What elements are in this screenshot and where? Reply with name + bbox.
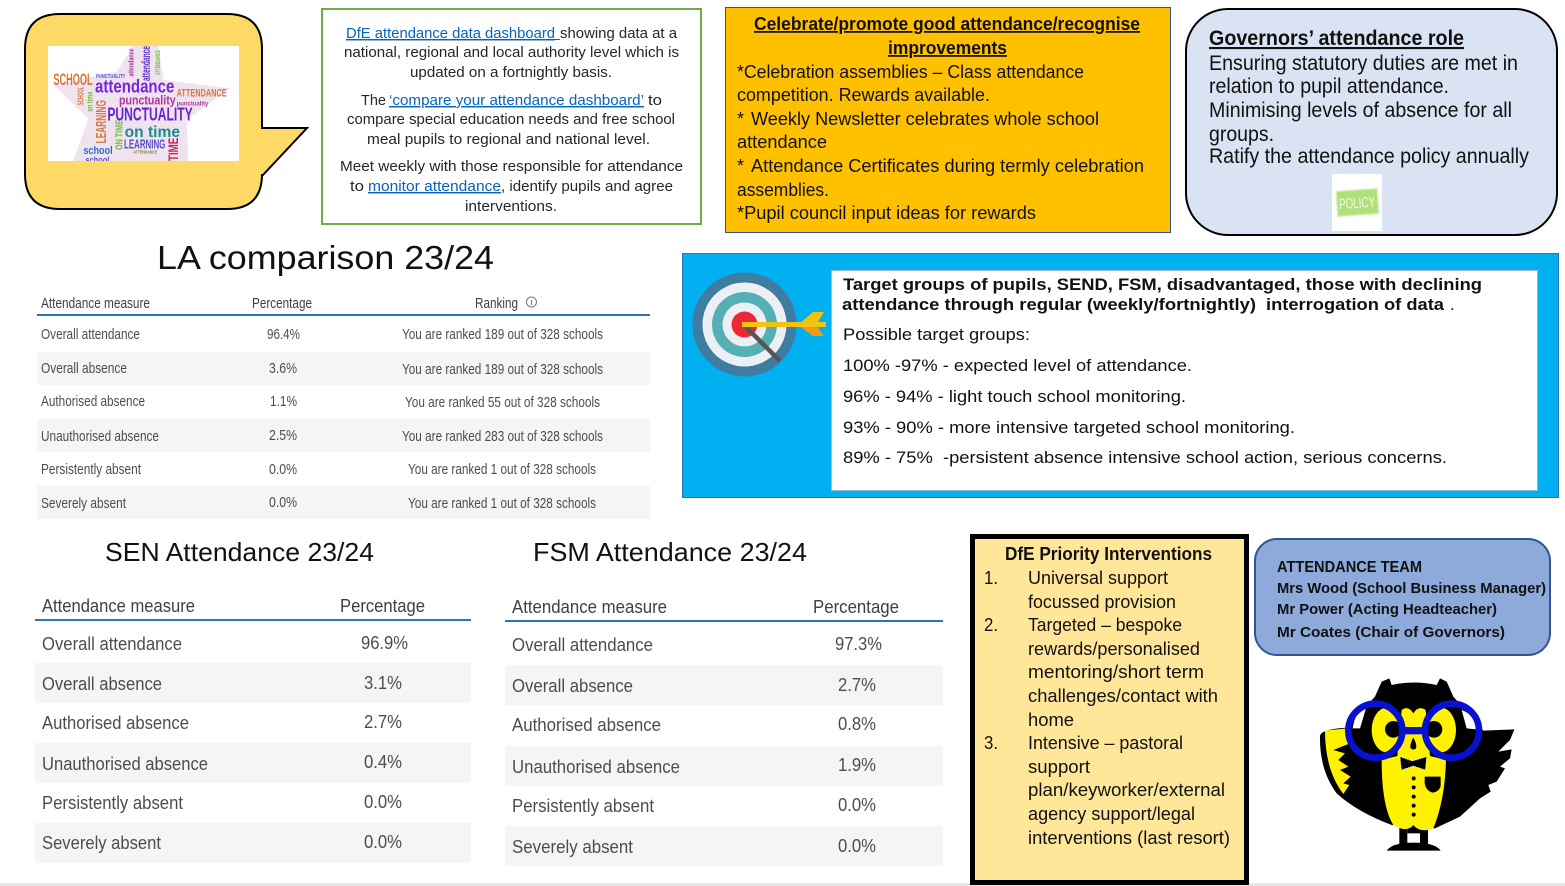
text: weekly meeting paragraph: to	[350, 179, 364, 195]
list item 1: focussed provision	[1028, 591, 1176, 612]
text: dashboard link paragraph: showing data at a	[560, 26, 678, 42]
list item 3: interventions (last resort)	[1028, 827, 1230, 848]
text: dashboard link paragraph: updated on a fortnightly basis.	[410, 65, 612, 81]
table header: Attendance measure	[512, 596, 667, 617]
row: overall absence	[35, 663, 471, 703]
heading: celebrate: improvements	[888, 38, 1007, 58]
image: star word cloud: PUNCTUALITY	[96, 74, 126, 80]
panel: attendance team	[1255, 539, 1550, 655]
row: overall attendance: Overall attendance	[41, 326, 140, 343]
row: overall attendance: Overall attendance	[42, 633, 182, 654]
row: overall attendance: Overall attendance	[512, 634, 653, 655]
text: governor duties: Ensuring statutory duties are met in	[1209, 52, 1518, 75]
row: persistently absent	[512, 794, 876, 816]
row: overall attendance	[41, 326, 603, 343]
row: unauthorised absence: Unauthorised absence	[512, 756, 680, 777]
list item 3: plan/keyworker/external	[1028, 779, 1225, 800]
image: star word cloud: LEARNING	[94, 100, 110, 143]
icon: owl mascot with glasses	[1320, 678, 1514, 851]
heading: celebrate	[754, 14, 1140, 58]
text: weekly meeting paragraph: interventions.	[465, 199, 557, 215]
text: governor duties: Ratify the attendance policy annually	[1209, 145, 1529, 168]
list item 1: Universal support	[1028, 567, 1168, 588]
row: overall absence	[505, 665, 943, 705]
table header: Ranking	[475, 295, 518, 312]
row: overall attendance: 96.4%	[267, 326, 300, 343]
image: star word cloud: LEARNING	[124, 138, 165, 152]
text: weekly meeting paragraph: monitor attendance	[368, 179, 501, 195]
table header	[35, 595, 471, 621]
list item 2: home	[1028, 709, 1074, 730]
text: target groups heading: Target groups of pupils, SEND, FSM, disadvantaged, those with declining	[843, 276, 1482, 294]
text: target groups heading	[842, 276, 1482, 314]
row: unauthorised absence: Unauthorised absence	[42, 753, 208, 774]
text: target groups heading: attendance through regular (weekly/fortnightly)	[842, 296, 1256, 314]
panel: speech bubble with word cloud	[25, 14, 307, 209]
row: unauthorised absence: 0.4%	[364, 751, 402, 772]
row: overall absence: 2.7%	[838, 674, 876, 695]
row: overall attendance	[42, 632, 408, 654]
row: persistently absent: You are ranked 1 out of 328 schools	[408, 461, 596, 478]
row: overall attendance: 97.3%	[835, 633, 882, 654]
text: attendance bands: 100% -97% - expected level of attendance.	[843, 357, 1192, 375]
row: authorised absence: Authorised absence	[42, 712, 189, 733]
heading: FSM attendance: FSM Attendance 23/24	[533, 537, 807, 567]
row: overall absence	[37, 352, 650, 385]
heading: attendance team: ATTENDANCE TEAM	[1277, 559, 1422, 576]
list item 1: 1.	[984, 567, 998, 588]
list item 2: mentoring/short term	[1028, 661, 1204, 682]
row: overall absence: 3.1%	[364, 672, 402, 693]
text: attendance bands: 96% - 94% - light touch school monitoring.	[843, 388, 1186, 406]
row: severely absent: 0.0%	[364, 831, 402, 852]
heading: SEN attendance: SEN Attendance 23/24	[105, 537, 374, 567]
text: attendance bands	[843, 326, 1447, 467]
text: team members: Mr Coates (Chair of Governors)	[1277, 625, 1505, 641]
row: severely absent	[37, 486, 650, 519]
panel: target groups text box	[832, 270, 1538, 490]
text: compare dashboard paragraph: The	[361, 93, 386, 109]
row: authorised absence: 0.8%	[838, 713, 876, 734]
text: attendance bands: 89% - 75% -persistent absence intensive school action, serious concerns.	[843, 449, 1447, 467]
row: authorised absence: 1.1%	[270, 393, 297, 410]
row: persistently absent: 0.0%	[364, 791, 402, 812]
heading: celebrate: Celebrate/promote good attendance/recognise	[754, 14, 1140, 34]
image: star word cloud: ON TIME	[115, 120, 126, 150]
text: celebration list: *	[737, 156, 744, 176]
heading: governors: Governors’ attendance role	[1209, 27, 1464, 50]
row: severely absent: Severely absent	[41, 495, 127, 512]
table header: Percentage	[252, 295, 312, 312]
text: team members	[1277, 581, 1546, 641]
list item 2: 2.	[984, 614, 998, 635]
list item 3: support	[1028, 756, 1090, 777]
row: overall absence: You are ranked 189 out of 328 schools	[402, 361, 603, 378]
row: overall attendance: 96.9%	[361, 632, 408, 653]
text: celebration list: Attendance Certificates during termly celebration	[751, 156, 1144, 176]
row: persistently absent	[41, 461, 596, 478]
row: persistently absent: Persistently absent	[42, 792, 183, 813]
row: severely absent	[35, 823, 471, 863]
heading: LA comparison: LA comparison 23/24	[157, 239, 494, 276]
row: severely absent: Severely absent	[42, 832, 161, 853]
image: star word cloud: ATTENDANCE	[133, 149, 157, 154]
text: target groups heading: interrogation of data	[1266, 296, 1445, 314]
text: celebration list: *Celebration assemblies – Class attendance	[737, 62, 1084, 82]
image: star word cloud: SCHOOL	[76, 87, 85, 105]
text: target groups heading: .	[1450, 296, 1455, 314]
image: star word cloud: TIME	[165, 138, 181, 161]
text: celebration list: *Pupil council input ideas for rewards	[737, 203, 1036, 223]
text: governor duties: groups.	[1209, 123, 1274, 146]
table header	[505, 596, 943, 622]
row: authorised absence: 2.7%	[364, 711, 402, 732]
row: authorised absence	[41, 393, 600, 411]
image: star word cloud: SCHOOL	[53, 70, 93, 89]
text: celebration list	[737, 62, 1144, 223]
row: persistently absent: Persistently absent	[512, 795, 654, 816]
list item 1	[984, 567, 1176, 612]
row: severely absent: 0.0%	[269, 494, 297, 511]
row: overall absence: Overall absence	[42, 673, 162, 694]
table: LA comparison	[37, 295, 650, 519]
image: star word cloud: school	[85, 155, 109, 165]
list item 3	[984, 732, 1230, 848]
list item 2: Targeted – bespoke	[1028, 614, 1182, 635]
image: star word cloud: on time	[86, 91, 95, 112]
text: team members: Mrs Wood (School Business Manager)	[1277, 581, 1546, 597]
table: SEN attendance	[35, 595, 471, 863]
image: star word cloud: attendance	[95, 76, 174, 96]
list item 3: agency support/legal	[1028, 803, 1195, 824]
table header: Percentage	[340, 595, 425, 616]
icon: policy stamp	[1332, 174, 1382, 231]
text: compare dashboard paragraph: compare special education needs and free school	[347, 112, 675, 128]
row: unauthorised absence	[35, 743, 471, 783]
row: unauthorised absence: You are ranked 283 out of 328 schools	[402, 428, 603, 445]
text: attendance bands: Possible target groups:	[843, 326, 1030, 344]
row: unauthorised absence: 1.9%	[838, 754, 876, 775]
row: severely absent	[505, 826, 943, 866]
row: authorised absence: You are ranked 55 out of 328 schools	[405, 394, 600, 411]
text: celebration list: assemblies.	[737, 180, 829, 200]
text: celebration list: competition. Rewards available.	[737, 85, 990, 105]
heading: priority interventions: DfE Priority Interventions	[1005, 543, 1212, 564]
text: team members: Mr Power (Acting Headteacher)	[1277, 602, 1497, 618]
text: celebration list: Weekly Newsletter celebrates whole school	[751, 109, 1099, 129]
list item 2: rewards/personalised	[1028, 638, 1200, 659]
text: compare dashboard paragraph: ‘compare your attendance dashboard’	[389, 93, 644, 109]
row: overall attendance: You are ranked 189 out of 328 schools	[402, 326, 603, 343]
row: authorised absence	[512, 713, 876, 735]
table: FSM attendance	[505, 596, 943, 866]
row: authorised absence: Authorised absence	[41, 393, 145, 410]
text: dashboard link paragraph: national, regional and local authority level which is	[344, 45, 679, 61]
list item 2	[984, 614, 1218, 730]
row: unauthorised absence	[37, 419, 650, 452]
image: star word cloud: punctuality	[177, 100, 209, 107]
panel: governors' attendance role	[1186, 9, 1557, 235]
list item 3: 3.	[984, 732, 998, 753]
panel: target groups	[682, 254, 1558, 498]
row: severely absent: 0.0%	[838, 835, 876, 856]
text: governor duties: relation to pupil attendance.	[1209, 75, 1449, 98]
table header: Attendance measure	[41, 295, 150, 312]
list item 2: challenges/contact with	[1028, 685, 1218, 706]
text: attendance bands: 93% - 90% - more intensive targeted school monitoring.	[843, 419, 1295, 437]
text: weekly meeting paragraph: , identify pupils and agree	[501, 179, 673, 195]
row: persistently absent	[42, 791, 402, 813]
row: persistently absent: 0.0%	[838, 794, 876, 815]
icon: policy stamp: POLICY	[1339, 194, 1376, 213]
text: dashboard link paragraph	[344, 26, 679, 81]
text: governor duties: Minimising levels of absence for all	[1209, 99, 1512, 122]
image: star word cloud: on time	[125, 124, 180, 141]
panel: DfE priority interventions	[972, 536, 1246, 882]
panel: celebrate good attendance	[726, 8, 1170, 232]
text: dashboard link paragraph: DfE attendance data dashboard	[346, 26, 555, 42]
image: star word cloud	[48, 46, 239, 165]
panel: DfE dashboard information	[322, 9, 701, 224]
table header: Attendance measure	[42, 595, 195, 616]
row: authorised absence: Authorised absence	[512, 714, 661, 735]
row: overall absence: Overall absence	[41, 360, 127, 377]
row: unauthorised absence: 2.5%	[269, 427, 297, 444]
text: weekly meeting paragraph	[340, 159, 683, 215]
text: weekly meeting paragraph: Meet weekly with those responsible for attendance	[340, 159, 683, 175]
row: authorised absence	[42, 711, 402, 733]
text: celebration list: *	[737, 109, 744, 129]
icon: target with arrow	[692, 272, 826, 376]
row: unauthorised absence	[505, 746, 943, 786]
row: overall attendance	[512, 633, 882, 655]
row: overall absence: Overall absence	[512, 675, 633, 696]
text: celebration list: attendance	[737, 132, 827, 152]
row: unauthorised absence: Unauthorised absence	[41, 428, 159, 445]
image: star word cloud: punctuality	[119, 92, 176, 107]
row: severely absent: You are ranked 1 out of 328 schools	[408, 495, 596, 512]
text: compare dashboard paragraph: to	[648, 93, 662, 109]
text: compare dashboard paragraph	[347, 93, 675, 148]
table header: Percentage	[813, 596, 899, 617]
list item 3: Intensive – pastoral	[1028, 732, 1183, 753]
image: star word cloud: school	[83, 145, 113, 157]
row: persistently absent: Persistently absent	[41, 461, 142, 478]
text: compare dashboard paragraph: meal pupils to regional and national level.	[367, 132, 650, 148]
text: governor duties	[1209, 52, 1529, 168]
row: persistently absent: 0.0%	[269, 461, 297, 478]
table header	[37, 295, 650, 316]
row: overall absence: 3.6%	[269, 360, 297, 377]
row: severely absent: Severely absent	[512, 836, 633, 857]
